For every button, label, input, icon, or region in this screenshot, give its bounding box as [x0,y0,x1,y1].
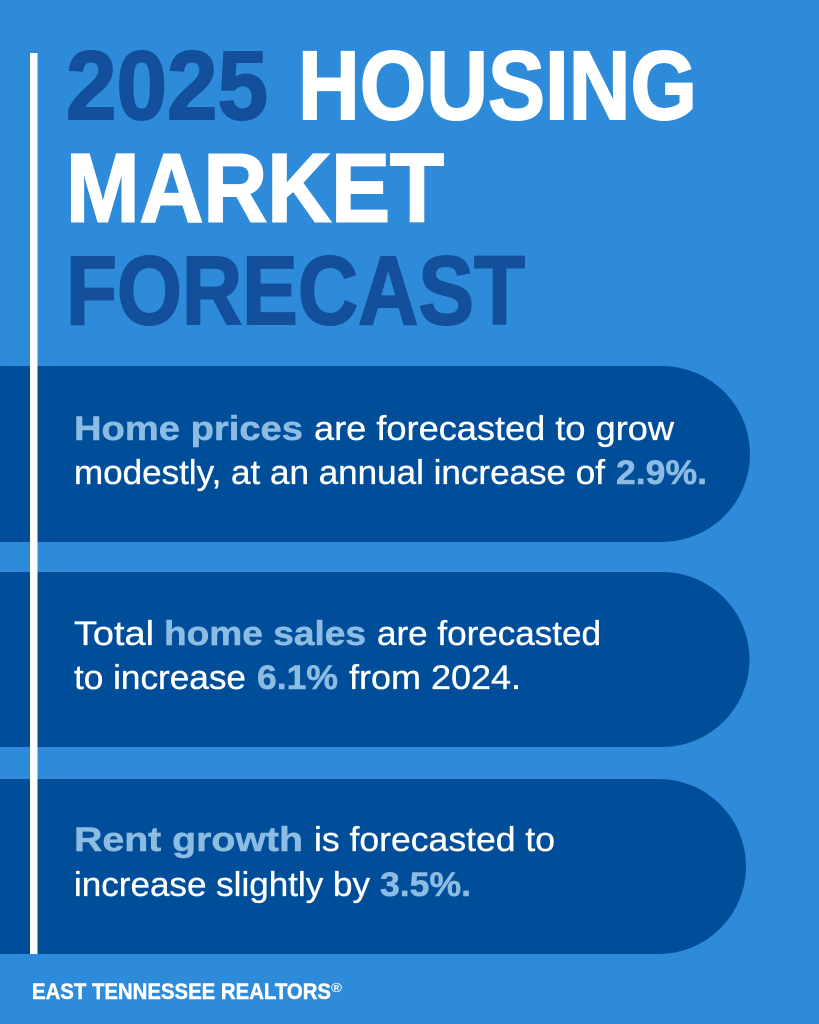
vertical white rule [30,53,38,954]
panel: home sales: to increase [74,659,246,697]
title: 2025 [66,31,268,140]
panel: rent growth: is forecasted to [314,821,555,859]
panel: rent growth [0,779,746,954]
panel: home prices: modestly, at an annual increase of [74,454,606,492]
panel: home prices [0,366,750,542]
panel: rent growth: 3.5%. [380,866,471,904]
title: MARKET [66,134,444,242]
title [66,31,697,345]
title: FORECAST [66,236,525,345]
panel: home sales: 6.1% [257,659,338,697]
panel: home sales: from 2024. [349,659,521,697]
panel: home sales [0,572,749,747]
panel: home prices: 2.9%. [616,454,707,492]
footer: organization name: ® [331,980,342,995]
panel: home sales: Total [74,615,154,653]
panel: home sales: home sales [164,615,366,653]
panel: home sales: are forecasted [377,615,601,653]
panel: rent growth: Rent growth [74,821,303,859]
panel: home prices: Home prices [74,410,303,448]
panel: home prices: are forecasted to grow [314,410,674,448]
panel: rent growth: increase slightly by [74,866,370,904]
footer: organization name: EAST TENNESSEE REALTORS [32,979,331,1004]
title: HOUSING [298,31,697,140]
